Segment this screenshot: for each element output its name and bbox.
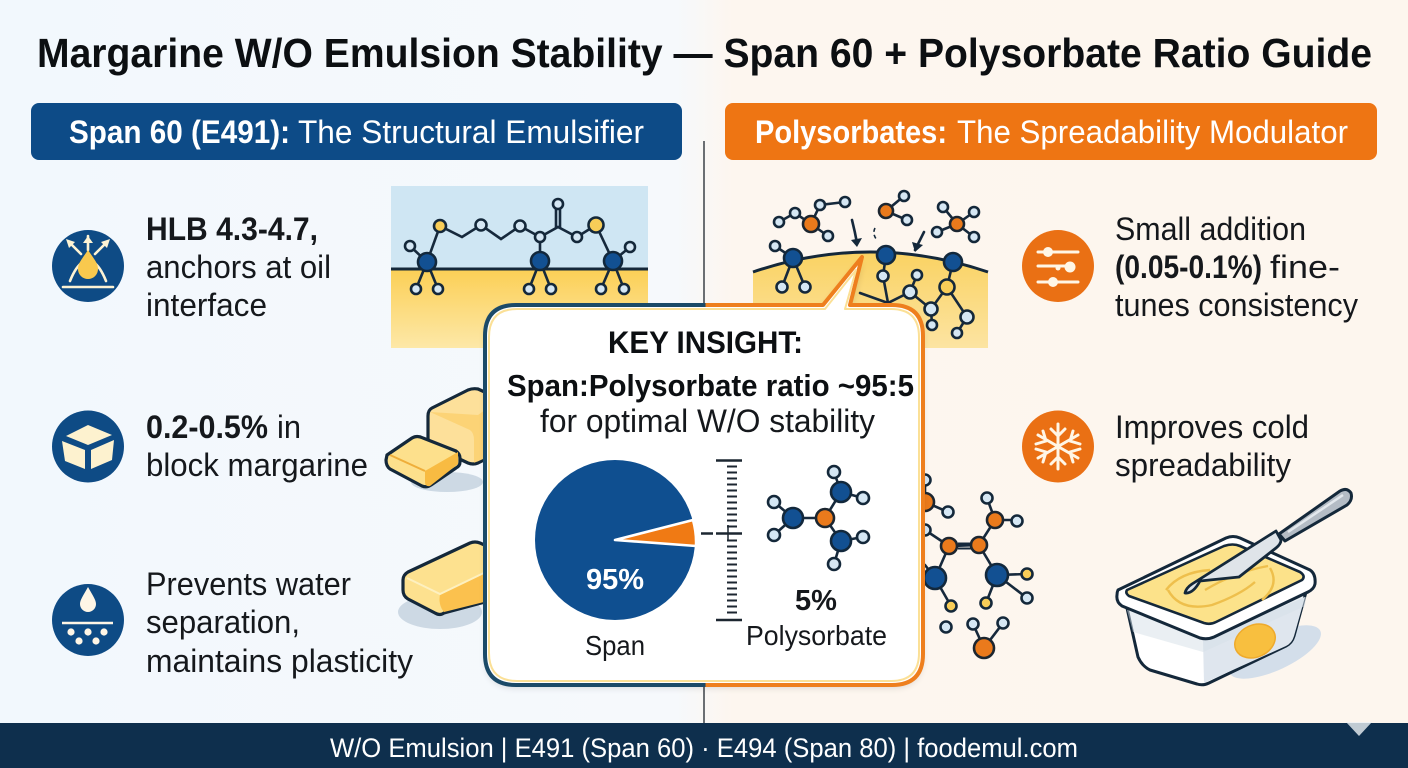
text: HLB: HLB 4.3-4.7, bbox=[146, 211, 318, 247]
callout: key insight bbox=[485, 257, 923, 687]
centre divider bbox=[703, 141, 705, 723]
text: usage level: 0.2-0.5% bbox=[146, 409, 268, 445]
molecule: polysorbate lower right bbox=[916, 474, 1032, 658]
text: prevents separation: separation, bbox=[146, 604, 300, 640]
molecule: polysorbate in callout bbox=[768, 466, 869, 570]
text: cold spreadability: spreadability bbox=[1115, 447, 1292, 483]
text: HLB: anchors at oil bbox=[146, 249, 331, 285]
heading: Polysorbates: The Spreadability Modulator bbox=[957, 114, 1348, 150]
heading: Span 60 bbox=[31, 103, 682, 160]
heading: Span 60: The Structural Emulsifier bbox=[298, 114, 644, 150]
pie chart: 95 to 5 ratio bbox=[535, 460, 696, 661]
text: small addition: fine- bbox=[1270, 249, 1340, 285]
text: small addition: Small addition bbox=[1115, 211, 1306, 247]
text: cold spreadability bbox=[1115, 409, 1309, 483]
text: usage level: block margarine bbox=[146, 447, 368, 483]
callout heading: KEY INSIGHT: bbox=[608, 324, 803, 360]
callout heading: Span:Polysorbate ratio ~95:5 bbox=[507, 368, 914, 403]
polysorbate label: 5% bbox=[795, 585, 837, 617]
icon: sliders bbox=[1022, 230, 1094, 302]
footer bar: W/O Emulsion | E491 (Span 60) · E494 (Span 80) | foodemul.com bbox=[330, 733, 1078, 763]
text: HLB bbox=[146, 211, 331, 323]
footer bar bbox=[0, 722, 1408, 768]
polysorbate label: Polysorbate bbox=[746, 620, 887, 651]
text: prevents separation: maintains plasticity bbox=[146, 643, 414, 679]
text: small addition bbox=[1115, 211, 1359, 323]
icon: oil drop anchoring bbox=[52, 230, 124, 302]
icon: snowflake bbox=[1022, 410, 1094, 482]
diagram: polysorbate at droplet interface bbox=[753, 191, 988, 348]
text: HLB: interface bbox=[146, 287, 267, 323]
text: prevents separation bbox=[146, 566, 414, 679]
text: cold spreadability: Improves cold bbox=[1115, 409, 1309, 445]
butter block: single bbox=[398, 542, 500, 629]
heading: Polysorbates bbox=[725, 103, 1377, 160]
polysorbate label bbox=[746, 585, 887, 651]
callout heading: for optimal W/O stability bbox=[540, 403, 875, 439]
title: Margarine W/O Emulsion Stability — Span 60 + Polysorbate Ratio Guide bbox=[37, 30, 1372, 76]
heading: Span 60: Span 60 (E491): bbox=[69, 114, 290, 150]
icon: water barrier bbox=[52, 584, 124, 656]
text: usage level: in bbox=[277, 409, 301, 445]
text: usage level bbox=[146, 409, 368, 483]
diagram: Span 60 anchored at oil interface bbox=[391, 186, 648, 348]
text: small addition: tunes consistency bbox=[1115, 287, 1359, 323]
pie chart: 95 to 5 ratio: Span bbox=[585, 630, 645, 661]
icon: block bbox=[52, 410, 124, 482]
text: small addition: (0.05-0.1%) bbox=[1115, 249, 1262, 285]
text: prevents separation: Prevents water bbox=[146, 566, 351, 602]
illustration: margarine tub with knife bbox=[1117, 489, 1352, 689]
heading: Polysorbates: Polysorbates: bbox=[755, 114, 947, 150]
pie chart: 95 to 5 ratio: 95% bbox=[586, 564, 644, 596]
callout heading bbox=[507, 324, 914, 439]
ratio scale bbox=[701, 460, 742, 620]
butter blocks: stacked bbox=[386, 389, 500, 492]
